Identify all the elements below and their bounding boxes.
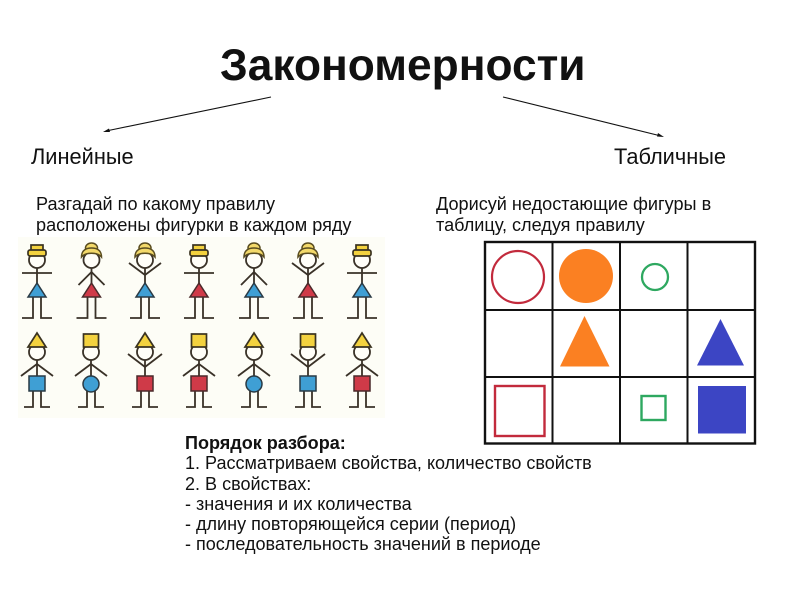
figure row 1, 7 [347,245,377,318]
figure row 1, 3 [129,243,161,318]
title: Закономерности [220,41,586,90]
shape: green circle outline [642,264,668,290]
arrow: to tabular [503,97,664,137]
text: table task [436,194,711,235]
text: analysis procedure: - значения и их количества [185,494,412,514]
text: linear task: Разгадай по какому правилу [36,194,275,214]
shape: orange triangle [560,316,610,366]
text: table task: таблицу, следуя правилу [436,214,645,234]
figure row 1, 5 [239,243,269,318]
text: analysis procedure: Порядок разбора: [185,433,346,453]
figure row 2, 2 [75,334,107,407]
arrow: to linear [103,97,271,132]
shape: red square outline [495,386,544,436]
heading: linear: Линейные [31,144,134,169]
heading: tabular: Табличные [614,144,726,169]
figure row 1, 2 [76,243,106,318]
text: analysis procedure: 2. В свойствах: [185,474,311,494]
figure row 2, 1 [21,333,53,407]
text: linear task: расположены фигурки в каждом ряду [36,214,351,234]
text: analysis procedure: 1. Рассматриваем свойства, количество свойств [185,453,592,473]
text: analysis procedure [185,433,592,554]
text: analysis procedure: - последовательность значений в периоде [185,534,541,554]
figure row 1, 6 [292,243,324,318]
figure row 2, 4 [183,334,215,407]
shape: red circle outline [492,251,544,303]
text: linear task [36,194,352,235]
shape: blue square [698,386,746,434]
panel: shapes table [485,242,755,444]
shape: orange circle [559,249,613,303]
text: table task: Дорисуй недостающие фигуры в [436,194,711,214]
figure row 1, 4 [184,245,214,318]
figure row 2, 3 [128,333,162,407]
shape: green square outline [642,396,666,420]
figure row 2, 6 [291,334,325,407]
text: analysis procedure: - длину повторяющейся серии (период) [185,514,516,534]
figure row 2, 5 [238,333,270,407]
figure row 1, 1 [22,245,52,318]
panel: stick figures [18,237,385,418]
figure row 2, 7 [346,333,378,407]
shape: blue triangle [697,319,744,366]
